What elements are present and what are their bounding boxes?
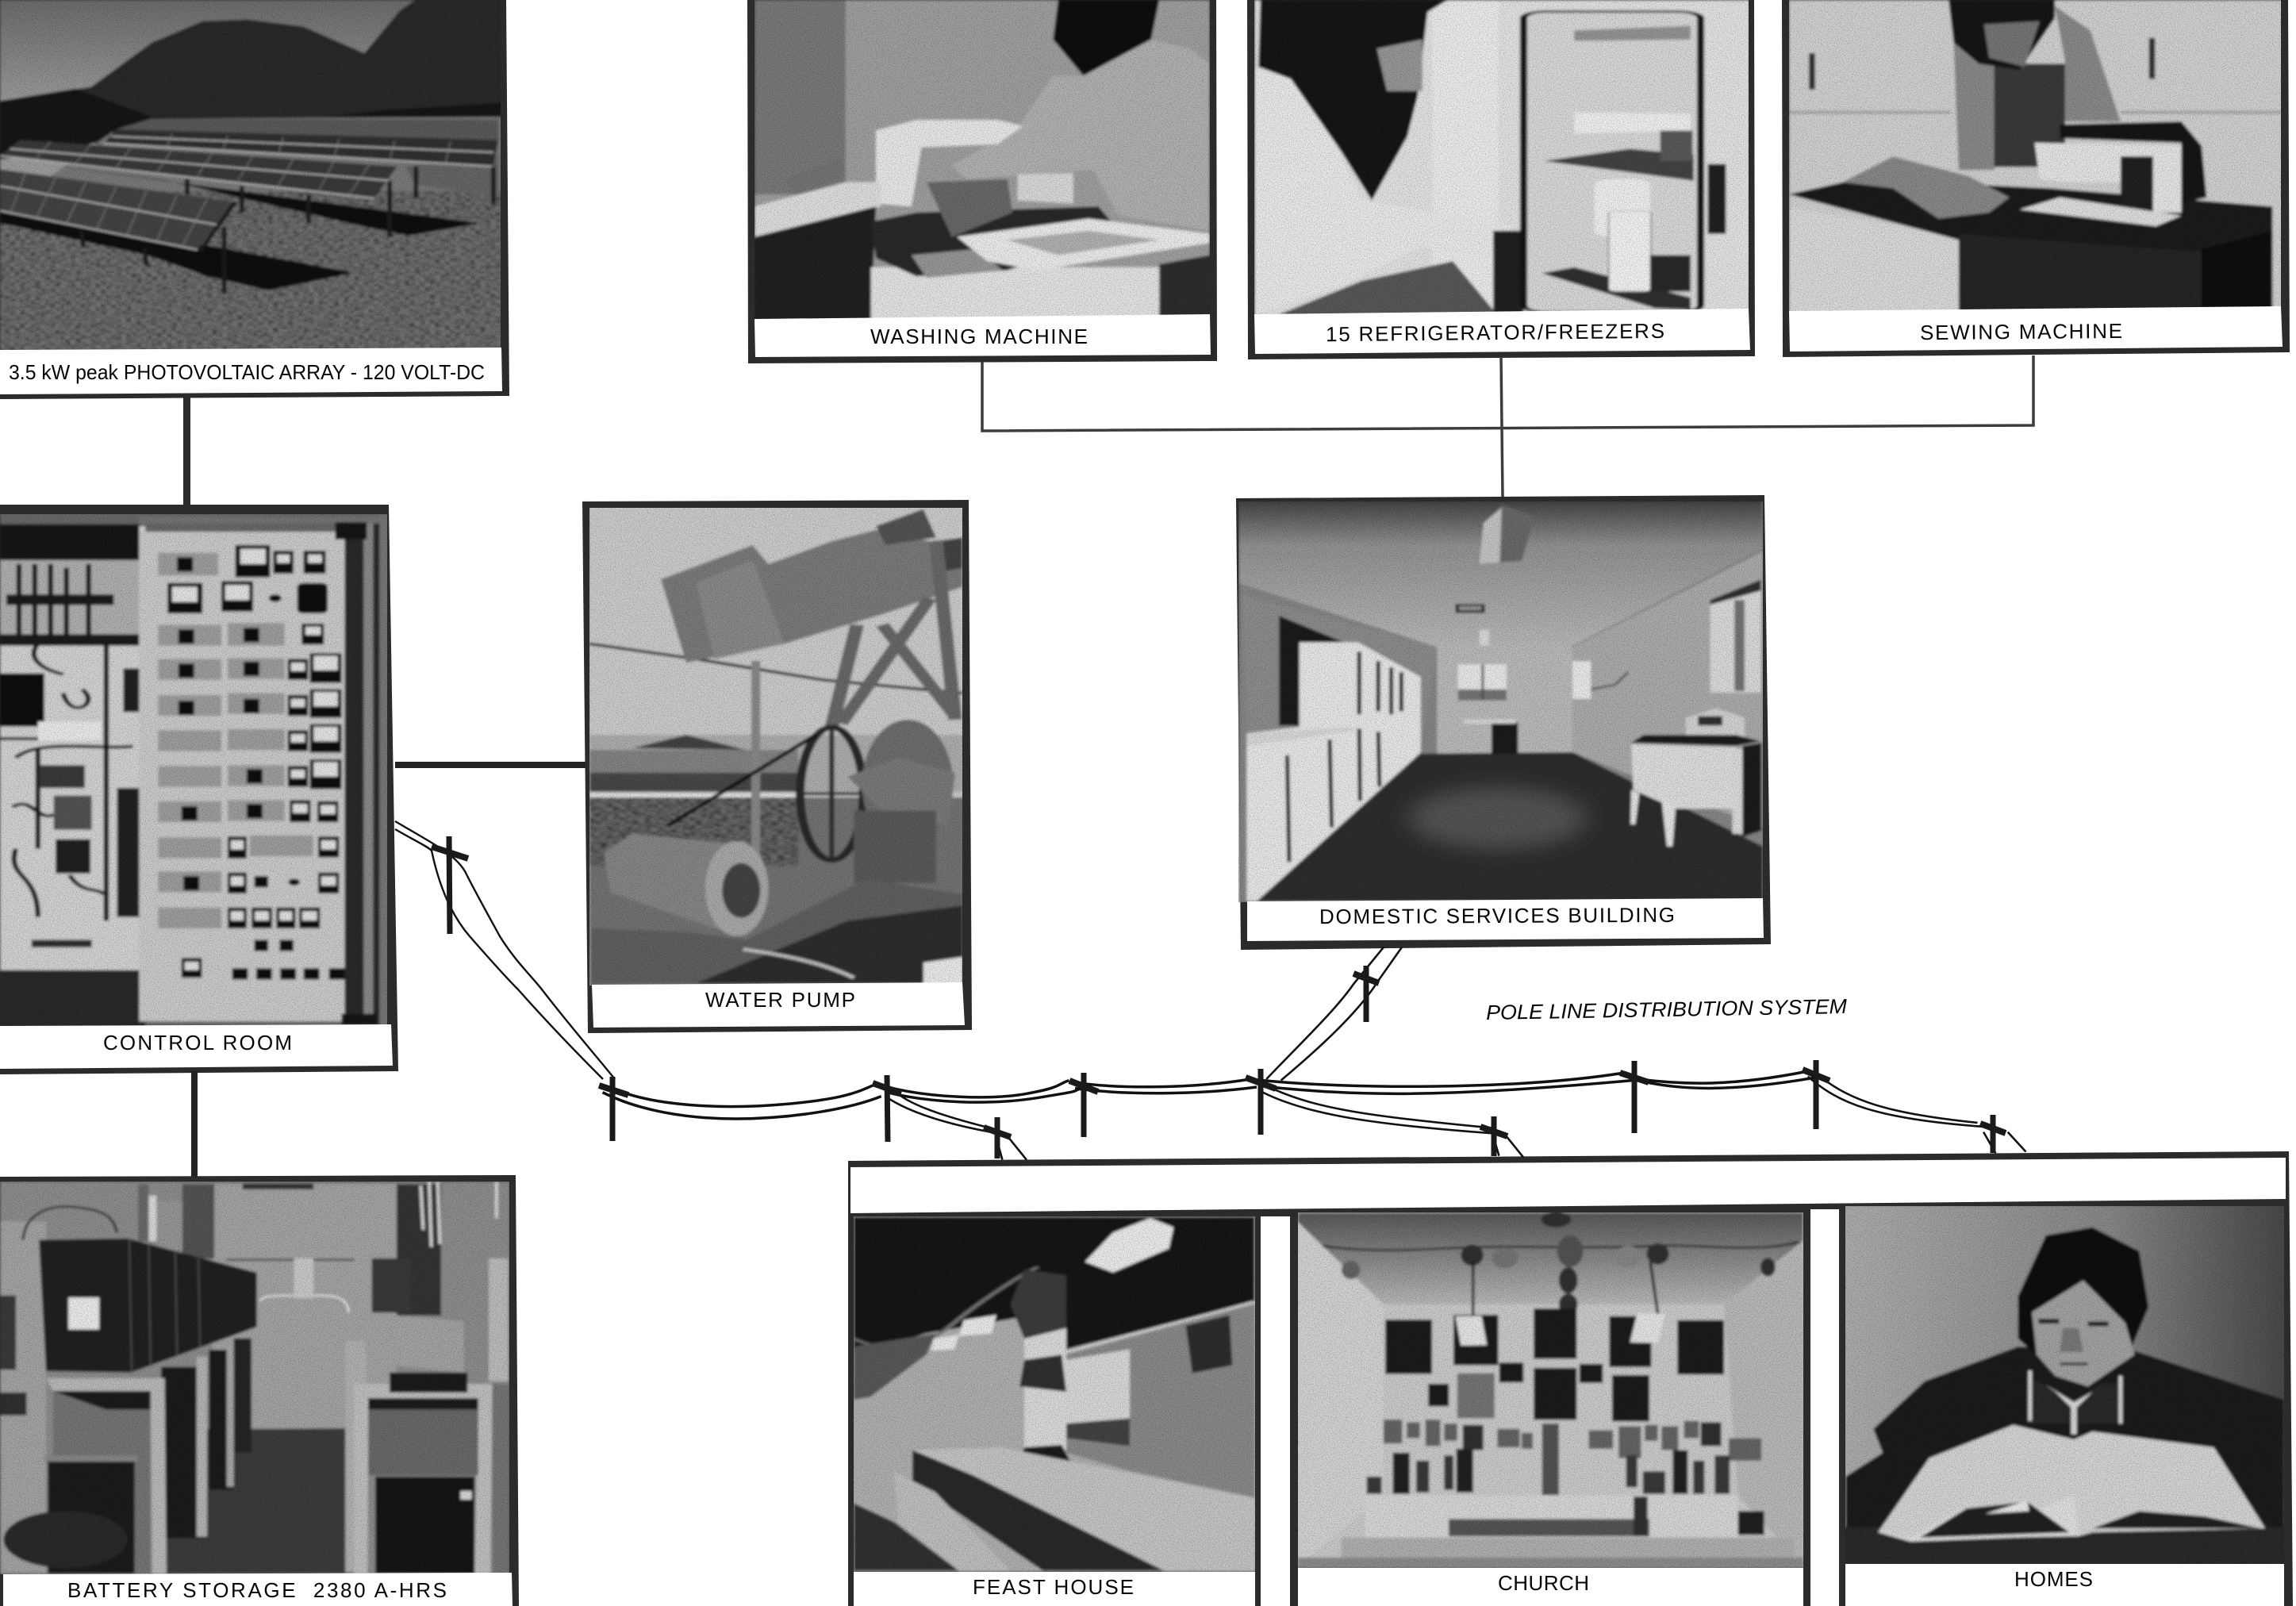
caption strip — [754, 314, 1211, 357]
photo: woman at washing machine — [754, 0, 1210, 322]
caption strip: church — [1298, 1568, 1803, 1606]
caption: homes: HOMES — [2014, 1567, 2093, 1591]
photo: pump jack and motor — [588, 503, 969, 989]
caption: washing machine: WASHING MACHINE — [870, 325, 1088, 348]
caption strip — [592, 982, 965, 1028]
panel: battery storage — [0, 1175, 519, 1606]
panel: loads box with feast house, church and homes — [848, 1151, 2293, 1606]
connector: control room to battery storage — [191, 1071, 198, 1178]
connector: appliances to domestic services building — [982, 355, 2033, 497]
photo: boy reading at home — [1844, 1204, 2286, 1564]
caption: feast house: FEAST HOUSE — [973, 1575, 1134, 1599]
caption: domestic services building: DOMESTIC SERVICES BUILDING — [1319, 903, 1675, 928]
caption strip — [3, 1573, 513, 1606]
caption strip: feast house — [854, 1572, 1255, 1606]
connector: array to control room — [183, 395, 190, 508]
caption: battery storage: BATTERY STORAGE 2380 A-HRS — [67, 1578, 447, 1602]
caption: water pump: WATER PUMP — [705, 988, 855, 1012]
caption: sewing machine: SEWING MACHINE — [1920, 319, 2122, 344]
caption: church: CHURCH — [1498, 1571, 1589, 1595]
panel: water pump — [582, 500, 972, 1033]
caption strip: homes — [1845, 1564, 2284, 1606]
caption: refrigerator freezers: 15 REFRIGERATOR/FREEZERS — [1326, 319, 1664, 346]
photo: solar panels in the desert — [0, 0, 506, 354]
caption strip — [1789, 306, 2283, 352]
panel: sewing machine — [1782, 0, 2290, 357]
photo: control panel — [0, 511, 392, 1027]
caption: control room: CONTROL ROOM — [103, 1031, 292, 1055]
caption strip — [1254, 309, 1750, 354]
utility poles — [432, 836, 2006, 1158]
photo: woman at sewing machine — [1789, 0, 2285, 316]
caption strip — [1247, 898, 1764, 941]
panel: control room — [0, 505, 398, 1074]
panel: domestic services building — [1236, 495, 1771, 950]
caption strip — [0, 348, 502, 394]
label: pole line distribution system: POLE LINE DISTRIBUTION SYSTEM — [1486, 994, 1848, 1024]
panel: washing machine — [747, 0, 1217, 363]
pole line wires — [395, 821, 2026, 1160]
caption: photovoltaic array: 3.5 kW peak PHOTOVOLTAIC ARRAY - 120 VOLT-DC — [9, 360, 485, 384]
photo: church altar — [1295, 1212, 1808, 1568]
caption strip — [0, 1024, 393, 1069]
photo: feast house interior — [852, 1216, 1257, 1572]
panel: photovoltaic array — [0, 0, 509, 399]
photo: woman at refrigerator — [1254, 0, 1750, 316]
photo: battery racks — [0, 1181, 510, 1575]
photo: laundry room interior — [1238, 501, 1764, 903]
connector: control room to water pump — [395, 762, 586, 768]
panel: refrigerator freezers — [1247, 0, 1755, 359]
